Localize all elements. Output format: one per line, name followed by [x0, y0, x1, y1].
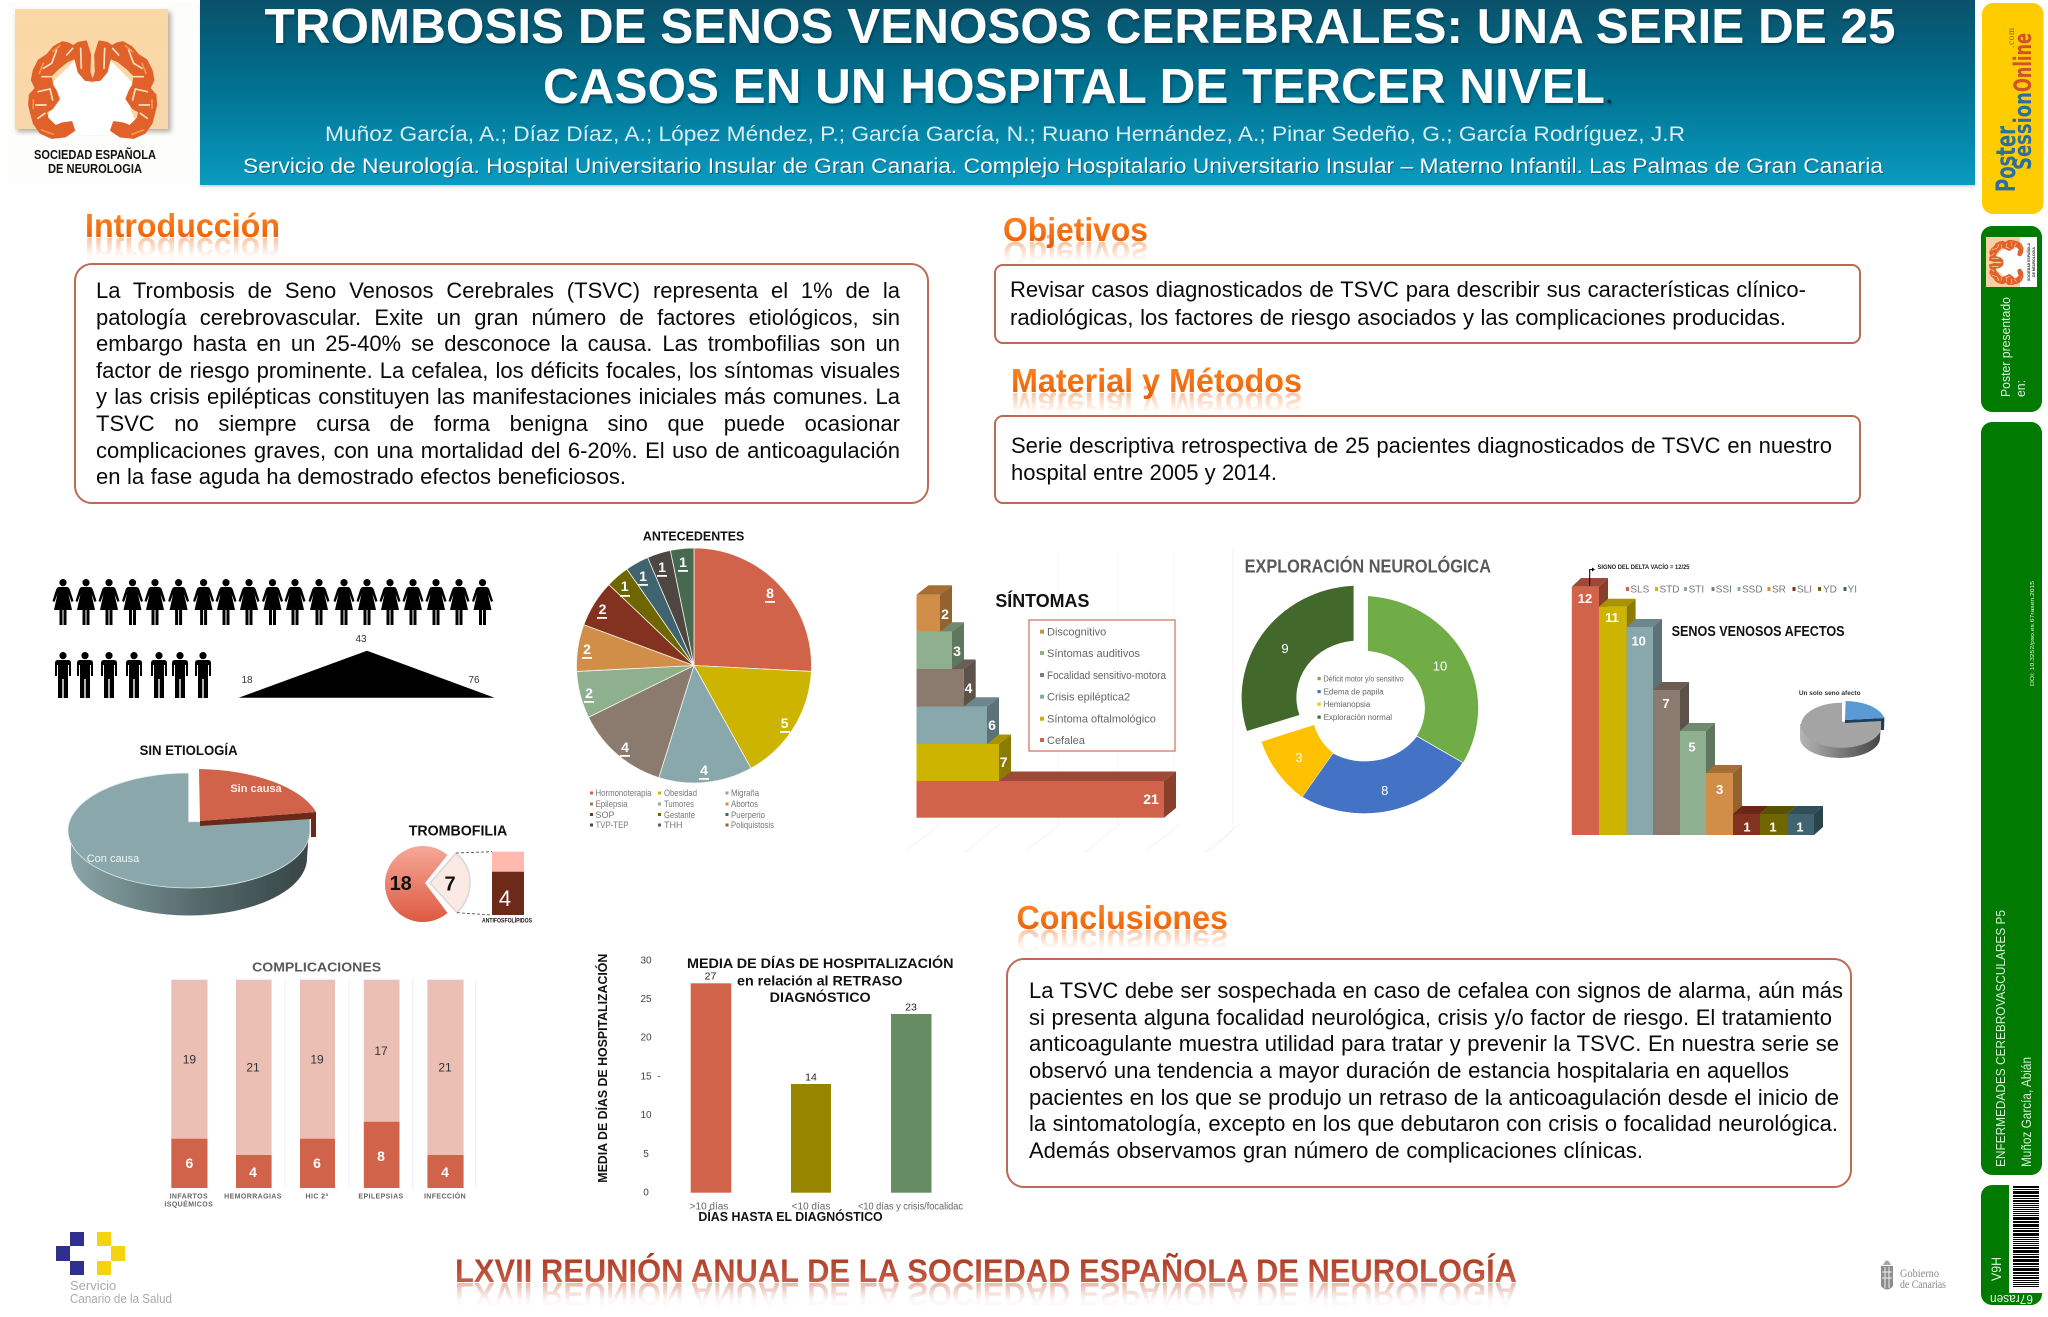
legend: antecedentes: THH	[664, 820, 682, 830]
heading: Conclusiones: Conclusiones	[1016, 899, 1228, 936]
chart: síntomas	[905, 552, 1240, 852]
chart: antecedentes: 4	[700, 762, 708, 778]
text: objetivos	[1010, 277, 1806, 330]
icon row: men	[55, 652, 211, 698]
chart: complicaciones: COMPLICACIONES	[252, 960, 381, 975]
sidebar: session details: ENFERMEDADES CEREBROVASCULARES P5	[1993, 910, 2008, 1167]
legend: exploración neurológica: Exploración normal	[1324, 713, 1392, 722]
chart: media de días de hospitalización: 23	[905, 1002, 917, 1014]
chart: senos venosos afectos: 11	[1605, 610, 1619, 625]
chart: antecedentes: 5	[781, 715, 789, 731]
text: objetivos: radiológicas, los factores de riesgo asociados y las complicaciones producidas.	[1010, 305, 1786, 330]
chart: media de días de hospitalización: 27	[705, 970, 716, 982]
chart: exploración neurológica	[1210, 550, 1491, 852]
chart: exploración neurológica: 10	[1433, 658, 1447, 674]
chart: síntomas: 6	[988, 717, 996, 733]
chart: media de días de hospitalización: 30	[640, 956, 652, 966]
sidebar: Poster Session Online badge: Online	[2009, 33, 2037, 92]
sidebar: poster presentado en: DE NEUROLOGIA	[2032, 247, 2036, 277]
logo: Servicio Canario de la Salud	[56, 1232, 172, 1306]
legend: antecedentes: Obesidad	[664, 788, 697, 798]
panel: conclusiones	[1006, 958, 1852, 1188]
chart: antecedentes: 2	[583, 641, 591, 657]
footer: congress title	[455, 1253, 1517, 1312]
chart: media de días de hospitalización: DIAGNÓSTICO	[770, 988, 871, 1005]
chart: antecedentes: 1	[658, 559, 666, 575]
chart: senos venosos afectos: 12	[1578, 591, 1592, 606]
chart: complicaciones: 21	[246, 1060, 260, 1074]
legend: senos: SR	[1772, 584, 1786, 596]
chart: exploración neurológica: 9	[1281, 641, 1289, 656]
chart: senos venosos afectos: SENOS VENOSOS AFECTOS	[1672, 624, 1845, 640]
panel: material y métodos	[994, 415, 1861, 504]
chart: exploración neurológica: EXPLORACIÓN NEUROLÓGICA	[1245, 556, 1491, 577]
logo: Sociedad Española de Neurología	[8, 2, 196, 184]
heading: Material y Métodos	[1011, 362, 1302, 423]
age distribution triangle: 76	[468, 675, 480, 686]
chart: antecedentes: 4	[621, 739, 629, 755]
chart: media de días de hospitalización: 10	[640, 1110, 652, 1121]
legend: senos: YD	[1823, 584, 1837, 596]
chart: síntomas: 7	[1000, 754, 1008, 770]
legend: antecedentes: Migraña	[731, 788, 759, 798]
chart: media de días de hospitalización: MEDIA DE DÍAS DE HOSPITALIZACIÓN	[595, 954, 610, 1183]
legend: exploración neurológica	[1318, 674, 1404, 722]
sidebar: session details: Muñoz García, Abián	[2019, 1057, 2034, 1167]
heading: Introducción: Introducción	[85, 207, 280, 244]
chart: senos venosos afectos: 3	[1716, 782, 1723, 797]
sidebar: session details	[1981, 422, 2042, 1175]
chart: antecedentes: 8	[766, 585, 774, 601]
mini pie: un solo seno afecto	[1799, 690, 1884, 758]
sidebar: poster presentado en: en:	[2014, 380, 2028, 397]
chart: senos venosos afectos: 1	[1769, 820, 1777, 834]
heading: Introducción: Introducción	[85, 231, 280, 268]
chart: complicaciones: 8	[377, 1148, 385, 1164]
sidebar: barcode tag: 67rasen	[1990, 1292, 2033, 1307]
heading: Introducción	[85, 207, 280, 268]
chart: trombofilia: ANTIFOSFOLÍPIDOS	[482, 916, 533, 925]
legend: exploración neurológica: Edema de papila	[1324, 688, 1384, 696]
text: conclusiones: si presenta alguna focalidad neurológica, crisis y/o factor de riesgo. El tratamiento	[1029, 1005, 1832, 1030]
legend: síntomas: Síntomas auditivos	[1047, 648, 1140, 660]
chart: media de días de hospitalización: 25	[640, 994, 652, 1005]
legend: síntomas: Focalidad sensitivo-motora	[1047, 670, 1167, 682]
title: .	[1606, 83, 1612, 108]
logo caption: SOCIEDAD ESPAÑOLA	[34, 147, 156, 162]
text: objetivos: Revisar casos diagnosticados de TSVC para describir sus características clínico-	[1010, 277, 1806, 302]
chart: trombofilia: 18	[390, 873, 412, 895]
text: material y métodos: hospital entre 2005 y 2014.	[1011, 460, 1277, 485]
sidebar: Poster Session Online badge: Session	[2009, 92, 2037, 170]
text: introducción: en la fase aguda ha demostrado efectos beneficiosos.	[96, 464, 626, 489]
chart: media de días de hospitalización: >10 días	[690, 1202, 728, 1212]
title	[264, 0, 1896, 114]
legend: senos: YI	[1848, 584, 1857, 596]
legend: antecedentes: Poliquistosis	[731, 820, 774, 830]
chart: senos venosos afectos: 10	[1631, 634, 1646, 648]
legend: síntomas: Cefalea	[1047, 735, 1086, 747]
chart: media de días de hospitalización: 14	[805, 1072, 817, 1084]
legend: antecedentes: Hormonoterapia	[596, 788, 652, 798]
chart: complicaciones: HEMORRAGIAS	[224, 1194, 282, 1201]
chart: media de días de hospitalización: 0	[643, 1188, 649, 1198]
chart: complicaciones: 17	[374, 1044, 388, 1058]
text: material y métodos: Serie descriptiva retrospectiva de 25 pacientes diagnosticados de TSVC en nuestro	[1011, 433, 1832, 458]
chart: media de días de hospitalización: 15	[640, 1072, 652, 1082]
logo: Servicio Canario de la Salud: Canario de la Salud	[70, 1291, 172, 1306]
chart: complicaciones: 6	[186, 1155, 194, 1171]
chart: antecedentes: 1	[639, 568, 647, 584]
chart: media de días de hospitalización: en relación al RETRASO	[737, 973, 903, 989]
sidebar: barcode tag	[1981, 1185, 2042, 1307]
chart: sin etiología	[68, 742, 316, 915]
chart: complicaciones: HIC 2ª	[306, 1194, 328, 1201]
chart: sin etiología: SIN ETIOLOGÍA	[140, 742, 238, 758]
chart: senos venosos afectos: 7	[1662, 696, 1670, 711]
legend: síntomas: Discognitivo	[1047, 626, 1106, 638]
chart: antecedentes: 2	[599, 601, 607, 617]
title: CASOS EN UN HOSPITAL DE TERCER NIVEL	[543, 60, 1605, 114]
text: introducción: patología cerebrovascular. Exite un gran número de factores etiológicos, sin	[96, 305, 900, 330]
chart: complicaciones: 19	[310, 1052, 324, 1066]
text: introducción	[96, 278, 900, 489]
chart: antecedentes: 1	[679, 554, 687, 570]
text: introducción: embargo hasta en un 25-40% se desconoce la causa. Las trombofilias son un	[96, 331, 900, 356]
chart: trombofilia: TROMBOFILIA	[409, 823, 507, 840]
age distribution triangle: 18	[241, 675, 253, 686]
legend: senos: STD	[1660, 584, 1680, 596]
logo: Gobierno de Canarias	[1881, 1260, 1946, 1291]
chart: sin etiología: Con causa	[87, 853, 140, 865]
sidebar: poster presentado en	[1981, 226, 2042, 412]
sidebar: Poster Session Online badge	[1982, 3, 2044, 214]
text: introducción: factor de riesgo prominente. La cefalea, los déficits focales, los síntomas visuales	[96, 358, 900, 383]
text: conclusiones: la sintomatología, excepto en los que debutaron con crisis o focalidad neurológica.	[1029, 1111, 1838, 1136]
chart: media de días de hospitalización: DÍAS HASTA EL DIAGNÓSTICO	[698, 1209, 883, 1224]
age distribution triangle: 43	[355, 634, 367, 645]
chart: senos venosos afectos: 1	[1743, 820, 1751, 834]
chart: complicaciones: 19	[183, 1052, 196, 1066]
legend: senos: SSD	[1742, 584, 1763, 596]
legend: síntomas: Crisis epiléptica2	[1047, 692, 1130, 704]
authors: Muñoz García, A.; Díaz Díaz, A.; López Méndez, P.; García García, N.; Ruano Hernández, A.; Pinar Sedeño, G.; García Rodríguez, J.R	[325, 123, 1685, 146]
legend: senos: STI	[1689, 584, 1704, 596]
heading: Objetivos: Objetivos	[1003, 235, 1148, 272]
chart: antecedentes: 1	[621, 578, 629, 594]
sidebar: barcode tag: V9H	[1988, 1257, 2004, 1281]
heading: Objetivos	[1003, 211, 1148, 272]
legend: senos: SLI	[1797, 584, 1812, 596]
chart: síntomas: 4	[965, 680, 973, 696]
logo: Gobierno de Canarias: Gobierno	[1900, 1268, 1939, 1280]
chart: senos venosos afectos: 5	[1688, 740, 1696, 754]
chart: antecedentes	[576, 529, 812, 830]
legend: senos: SLS	[1630, 584, 1650, 596]
legend: antecedentes: Tumores	[664, 799, 694, 809]
chart: senos venosos afectos	[1572, 562, 1884, 835]
chart: trombofilia	[385, 823, 533, 925]
text: conclusiones: Además observamos gran número de complicaciones clínicas.	[1029, 1138, 1643, 1163]
legend: síntomas: Síntoma oftalmológico	[1047, 714, 1156, 726]
chart: complicaciones: 6	[313, 1155, 321, 1171]
sidebar: session details: DOI: 10.3252/pso.es.67rasen.2015	[2030, 581, 2036, 686]
mini pie: un solo seno afecto: Un solo seno afecto	[1799, 690, 1861, 697]
age distribution triangle	[239, 634, 495, 698]
panel: introducción	[74, 263, 929, 504]
chart: complicaciones: INFECCIÓN	[424, 1192, 466, 1201]
header band	[200, 0, 1975, 185]
chart: media de días de hospitalización: 5	[643, 1149, 649, 1160]
text: introducción: complicaciones graves, con una mortalidad del 6-20%. El uso de anticoagulación	[96, 438, 900, 463]
chart: exploración neurológica: 8	[1381, 783, 1388, 798]
chart: complicaciones: EPILEPSIAS	[358, 1194, 404, 1201]
chart: complicaciones	[164, 960, 476, 1209]
chart: antecedentes: 2	[585, 685, 593, 701]
chart: complicaciones: 4	[249, 1164, 257, 1180]
chart: síntomas: 21	[1143, 791, 1159, 807]
logo caption: DE NEUROLOGIA	[48, 162, 142, 176]
legend: senos: SSI	[1716, 584, 1732, 596]
heading: Conclusiones	[1016, 899, 1228, 960]
legend: síntomas	[1029, 620, 1175, 751]
legend: exploración neurológica: Déficit motor y/o sensitivo	[1324, 674, 1404, 684]
chart: síntomas: SÍNTOMAS	[995, 590, 1089, 611]
chart: senos venosos afectos: 1	[1796, 820, 1804, 834]
text: conclusiones: anticoagulante muestra utilidad para tratar y prevenir la TSVC. En nuestra serie se	[1029, 1031, 1839, 1056]
sidebar: Poster Session Online badge: .com	[2006, 28, 2016, 48]
legend: antecedentes: Puerperio	[731, 810, 765, 820]
chart: media de días de hospitalización: <10 días	[792, 1202, 830, 1212]
text: conclusiones: observó una tendencia a mayor duración de estancia hospitalaria en aquellos	[1029, 1058, 1789, 1083]
legend: antecedentes	[590, 788, 774, 830]
text: introducción: TSVC no siempre cursa de forma benigna sino que puede ocasionar	[96, 411, 900, 436]
chart: complicaciones: 21	[438, 1060, 452, 1074]
chart: media de días de hospitalización: 20	[640, 1032, 652, 1044]
title: TROMBOSIS DE SENOS VENOSOS CEREBRALES: UNA SERIE DE 25	[264, 0, 1896, 54]
chart: exploración neurológica: 3	[1295, 750, 1303, 765]
text: conclusiones: La TSVC debe ser sospechada en caso de cefalea con signos de alarma, aún más	[1029, 978, 1843, 1003]
legend: antecedentes: Epilepsia	[596, 799, 628, 809]
chart: media de días de hospitalización: MEDIA DE DÍAS DE HOSPITALIZACIÓN	[687, 954, 954, 971]
text: conclusiones: pacientes en los que se produjo un retraso de la anticoagulación desde el inicio de	[1029, 1085, 1839, 1110]
logo: Gobierno de Canarias: de Canarias	[1900, 1279, 1946, 1291]
sidebar: poster presentado en: Poster presentado	[1999, 297, 2013, 397]
sidebar: Poster Session Online badge: Poster	[1991, 126, 2022, 192]
chart: media de días de hospitalización	[595, 954, 963, 1224]
legend: antecedentes: Abortos	[731, 799, 758, 809]
chart: complicaciones: 4	[441, 1164, 449, 1180]
chart: síntomas: 3	[953, 643, 961, 659]
text: conclusiones	[1029, 978, 1843, 1163]
chart: media de días de hospitalización: <10 días y crisis/focalidac	[858, 1202, 963, 1212]
arrow: signo del delta vacío	[1590, 562, 1690, 586]
panel: objetivos	[994, 264, 1861, 344]
chart: complicaciones: INFARTOS	[170, 1194, 208, 1201]
chart: sin etiología: Sin causa	[230, 783, 283, 795]
heading: Objetivos: Objetivos	[1003, 211, 1148, 248]
sidebar: poster presentado en: SOCIEDAD ESPAÑOLA	[2026, 243, 2031, 281]
chart: síntomas: 2	[941, 606, 949, 622]
heading: Conclusiones: Conclusiones	[1016, 923, 1228, 960]
chart: trombofilia: 7	[444, 874, 456, 896]
arrow: signo del delta vacío: SIGNO DEL DELTA VACÍO = 12/25	[1598, 562, 1690, 571]
chart: trombofilia: 4	[499, 886, 511, 911]
footer: congress title: LXVII REUNIÓN ANUAL DE LA SOCIEDAD ESPAÑOLA DE NEUROLOGÍA	[455, 1253, 1517, 1289]
footer: congress title: LXVII REUNIÓN ANUAL DE LA SOCIEDAD ESPAÑOLA DE NEUROLOGÍA	[455, 1276, 1517, 1312]
chart: complicaciones: ISQUÉMICOS	[164, 1200, 213, 1209]
legend: exploración neurológica: Hemianopsia	[1324, 700, 1371, 709]
chart: media de días de hospitalización: -	[657, 1072, 661, 1082]
icon row: women	[52, 579, 493, 625]
legend: antecedentes: TVP-TEP	[596, 820, 628, 830]
heading: Material y Métodos: Material y Métodos	[1011, 362, 1302, 399]
affiliation: Servicio de Neurología. Hospital Universitario Insular de Gran Canaria. Complejo Hospitalario Universitario Insular – Materno Infantil. Las Palmas de Gran Canaria	[243, 154, 1883, 178]
heading: Material y Métodos: Material y Métodos	[1011, 386, 1302, 423]
text: material y métodos	[1011, 433, 1832, 485]
legend: senos	[1626, 584, 1857, 596]
chart: antecedentes: ANTECEDENTES	[643, 529, 745, 544]
logo: Servicio Canario de la Salud: Servicio	[70, 1278, 116, 1293]
legend: antecedentes: Gestante	[664, 810, 695, 820]
legend: antecedentes: SOP	[596, 810, 615, 820]
text: introducción: La Trombosis de Seno Venosos Cerebrales (TSVC) representa el 1% de la	[96, 278, 900, 303]
text: introducción: y las crisis epilépticas constituyen las manifestaciones iniciales más comunes. La	[96, 384, 900, 409]
logo caption	[34, 147, 156, 176]
